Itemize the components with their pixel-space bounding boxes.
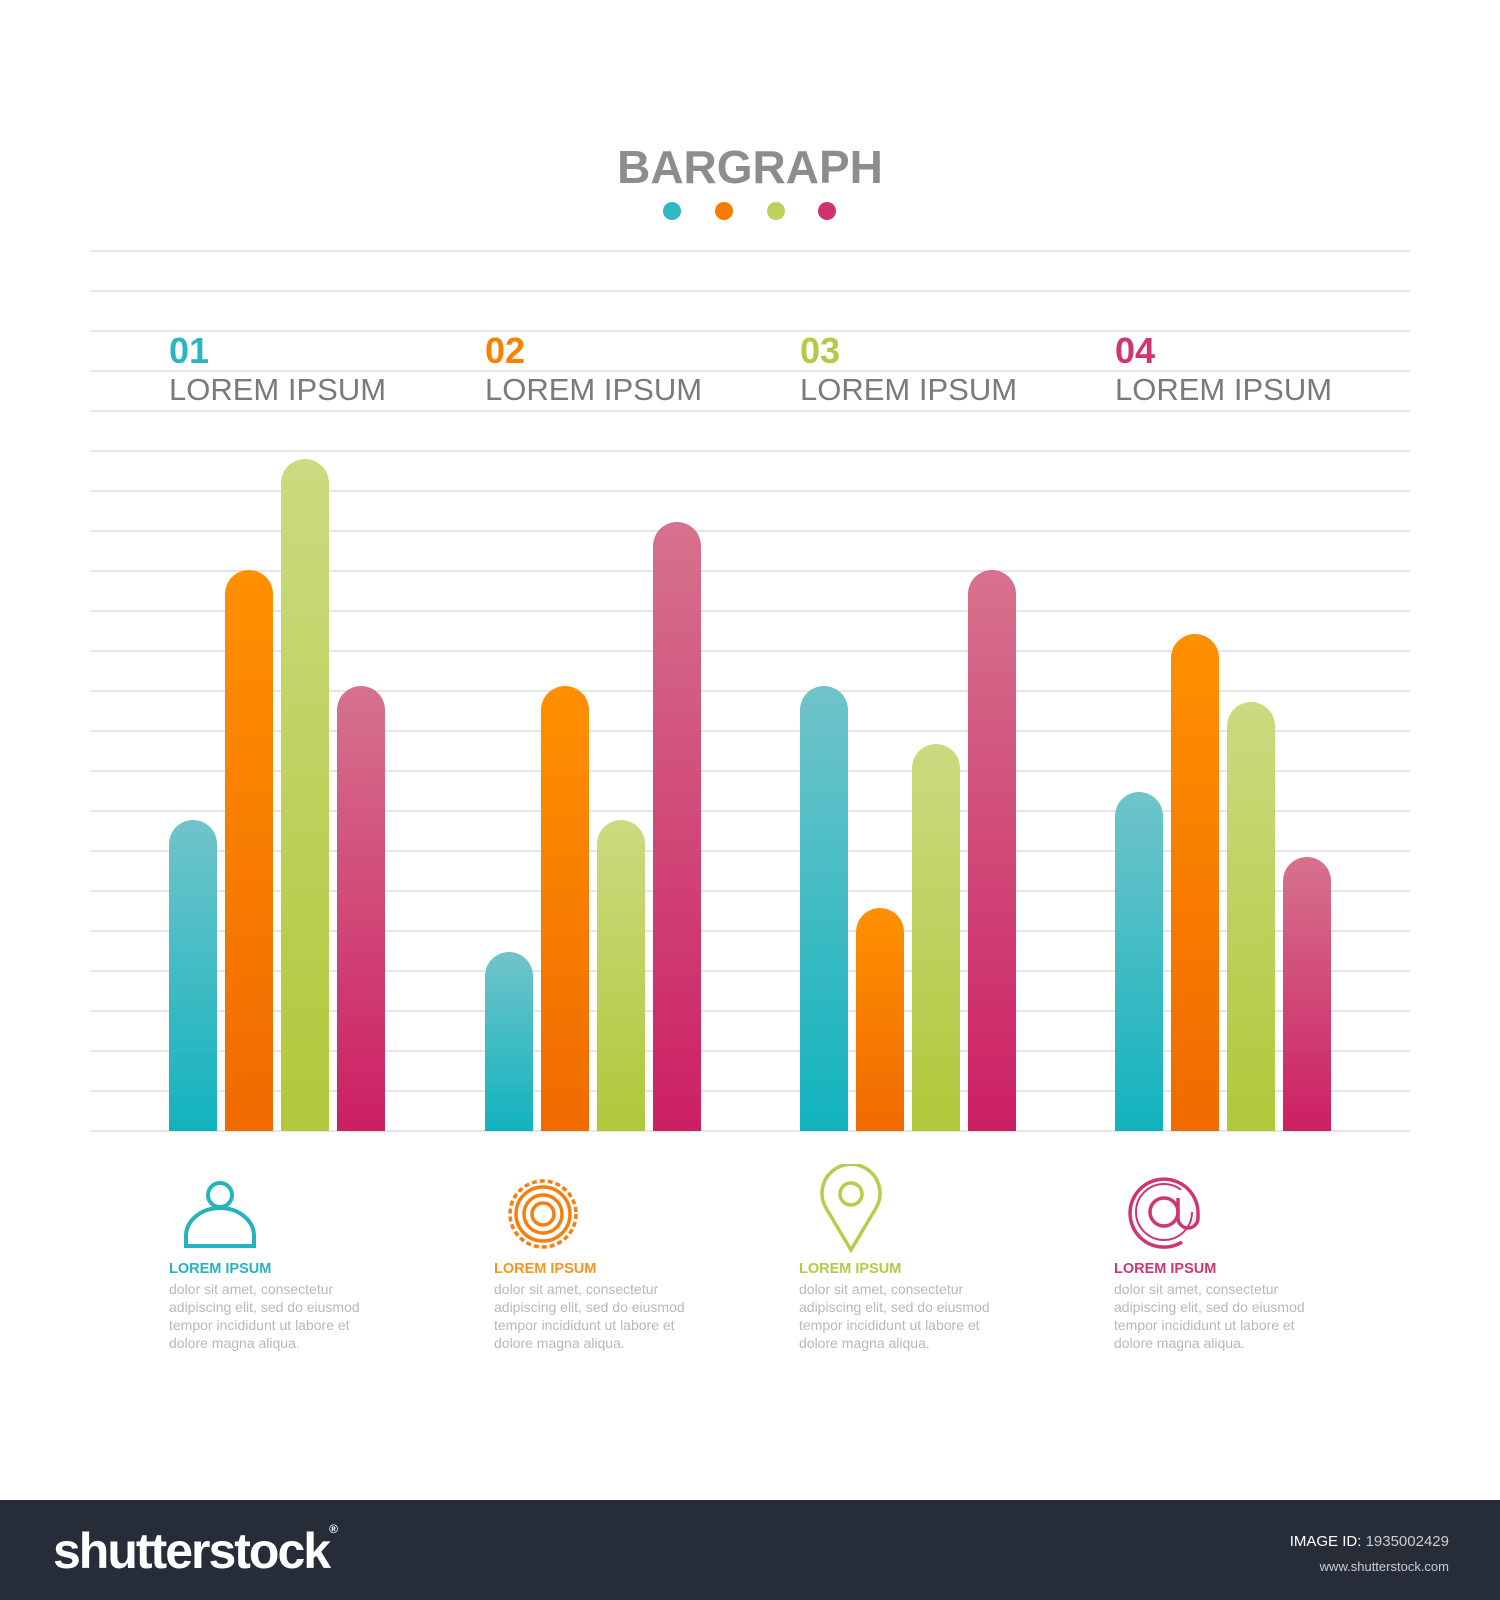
footer image id xyxy=(1290,1533,1449,1574)
bar group 4 xyxy=(1115,634,1331,1131)
header 03: 03 xyxy=(800,330,840,371)
text 4: dolor sit amet, consectetur adipiscing elit, sed do eiusmod tempor incididunt ut labore et dolore magna aliqua. xyxy=(1114,1281,1305,1351)
text 3: dolor sit amet, consectetur adipiscing elit, sed do eiusmod tempor incididunt ut labore et dolore magna aliqua. xyxy=(799,1281,990,1351)
icon: gear xyxy=(508,1179,578,1249)
icon: at sign xyxy=(1128,1177,1200,1249)
header text 4: LOREM IPSUM xyxy=(1115,372,1332,407)
header 02: 02 xyxy=(485,330,525,371)
icon: person xyxy=(184,1181,256,1248)
label 2: LOREM IPSUM xyxy=(494,1261,596,1277)
icon: location pin xyxy=(820,1164,882,1254)
header 04: 04 xyxy=(1115,330,1155,371)
label 3: LOREM IPSUM xyxy=(799,1261,901,1277)
bar group 2 xyxy=(485,522,701,1131)
footer xyxy=(0,1500,1500,1600)
bar group 3 xyxy=(800,570,1016,1131)
header text 1: LOREM IPSUM xyxy=(169,372,386,407)
header 01: 01 xyxy=(169,330,209,371)
text 1: dolor sit amet, consectetur adipiscing elit, sed do eiusmod tempor incididunt ut labore et dolore magna aliqua. xyxy=(169,1281,360,1351)
footer image id: IMAGE ID: 1935002429 xyxy=(1290,1533,1449,1550)
footer logo: shutterstock® xyxy=(53,1522,336,1579)
label 1: LOREM IPSUM xyxy=(169,1261,271,1277)
label 4: LOREM IPSUM xyxy=(1114,1261,1216,1277)
header text 3: LOREM IPSUM xyxy=(800,372,1017,407)
text 2: dolor sit amet, consectetur adipiscing elit, sed do eiusmod tempor incididunt ut labore et dolore magna aliqua. xyxy=(494,1281,685,1351)
title: BARGRAPH xyxy=(617,141,883,193)
footer image id: www.shutterstock.com xyxy=(1320,1559,1449,1574)
legend dots xyxy=(663,202,836,220)
header text 2: LOREM IPSUM xyxy=(485,372,702,407)
bar group 1 xyxy=(169,459,385,1131)
